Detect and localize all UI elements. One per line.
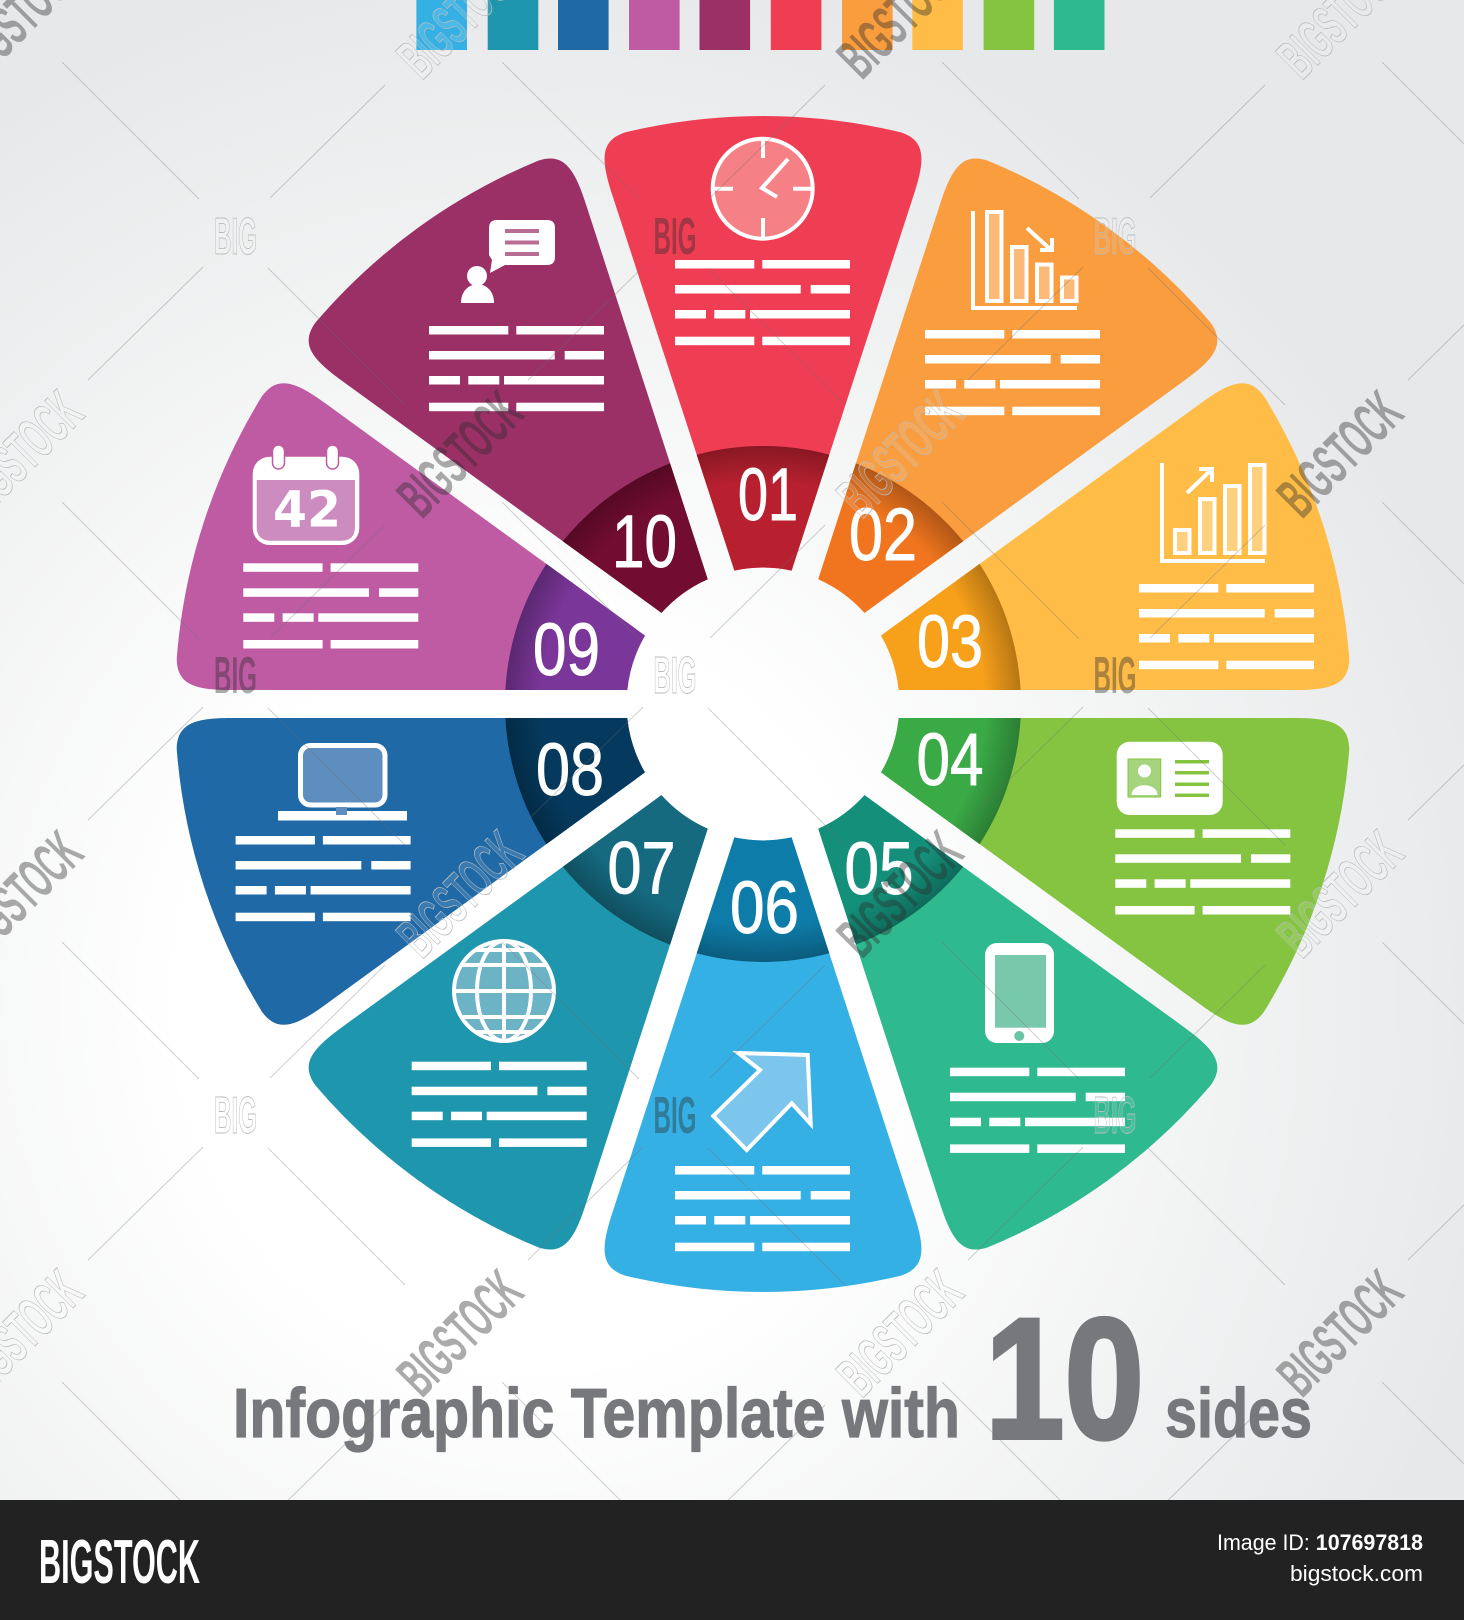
panel: section 09 calendar: 09 [533, 608, 600, 691]
panel: section 07 globe [289, 719, 813, 1273]
watermark: BIG stamps: BIG [214, 208, 257, 266]
text: BIG [1094, 208, 1136, 266]
watermark: BIGSTOCK diagonal stamps: BIGSTOCK [385, 819, 535, 969]
panel: section 02 falling bar chart [713, 135, 1237, 689]
footer bar: Image ID: 107697818 [1217, 1530, 1423, 1555]
icon: calendar 42 [253, 445, 359, 545]
footer bar: BIGSTOCK [39, 1528, 200, 1597]
watermark: BIGSTOCK diagonal stamps: BIGSTOCK [825, 379, 975, 529]
panel: section 05 tablet [713, 719, 1237, 1273]
panel: section 08 monitor: 08 [536, 728, 604, 811]
watermark: BIGSTOCK diagonal stamps: BIGSTOCK [385, 1258, 535, 1408]
icon: computer monitor [278, 746, 407, 820]
footer bar: bigstock.com [1290, 1561, 1423, 1586]
icon: person with speech bubble [461, 220, 555, 303]
watermark: BIG stamps [214, 208, 1136, 1145]
icon: clock [713, 139, 813, 239]
icon: rising bar chart [1162, 463, 1265, 561]
watermark: BIG stamps: BIG [654, 208, 696, 266]
title: Infographic Template with [233, 1374, 960, 1452]
panel: section 04 ID card: 04 [916, 718, 984, 801]
panel: section 03 rising bar chart: 03 [917, 600, 983, 683]
panel: section 01 clock: 01 [738, 453, 798, 536]
panel: section 10 speech bubble [289, 135, 813, 689]
icon: calendar 42: 42 [273, 481, 341, 539]
panel: section 06 arrow: 06 [730, 866, 799, 949]
watermark: BIG stamps: BIG [214, 647, 257, 705]
panel: section 07 globe: 07 [608, 827, 676, 910]
title [233, 1283, 1312, 1475]
icon: ID card [1117, 742, 1223, 815]
watermark: BIGSTOCK diagonal stamps: BIGSTOCK [825, 819, 975, 969]
panel: section 06 arrow [605, 837, 921, 1292]
text: BIG [1094, 647, 1136, 705]
panel: section 09 calendar [155, 372, 685, 813]
icon: falling bar chart [973, 211, 1077, 308]
watermark: BIG stamps: BIG [654, 647, 696, 705]
watermark: BIGSTOCK diagonal stamps: BIGSTOCK [825, 1258, 975, 1408]
watermark: BIG stamps: BIG [214, 1087, 257, 1145]
title: 10 [985, 1283, 1144, 1475]
watermark: BIG stamps: BIG [654, 1087, 696, 1145]
panel: section 03 rising bar chart [841, 372, 1371, 813]
icon: globe [454, 941, 554, 1041]
panel: section 04 ID card [841, 595, 1371, 1036]
footer bar [0, 1500, 1464, 1620]
panel: section 01 clock [605, 116, 921, 571]
title: sides [1165, 1374, 1312, 1452]
panel: section 02 falling bar chart: 02 [849, 493, 917, 576]
panel: section 08 monitor [155, 595, 685, 1036]
panel: section 10 speech bubble: 10 [612, 500, 677, 583]
panel: section 05 tablet: 05 [844, 827, 914, 910]
icon: diagonal arrow [713, 1053, 811, 1150]
watermark: BIGSTOCK diagonal stamps: BIGSTOCK [385, 379, 535, 529]
icon: tablet [985, 943, 1054, 1043]
colour swatch strip [416, 0, 1104, 50]
text: BIG [1094, 1087, 1136, 1145]
